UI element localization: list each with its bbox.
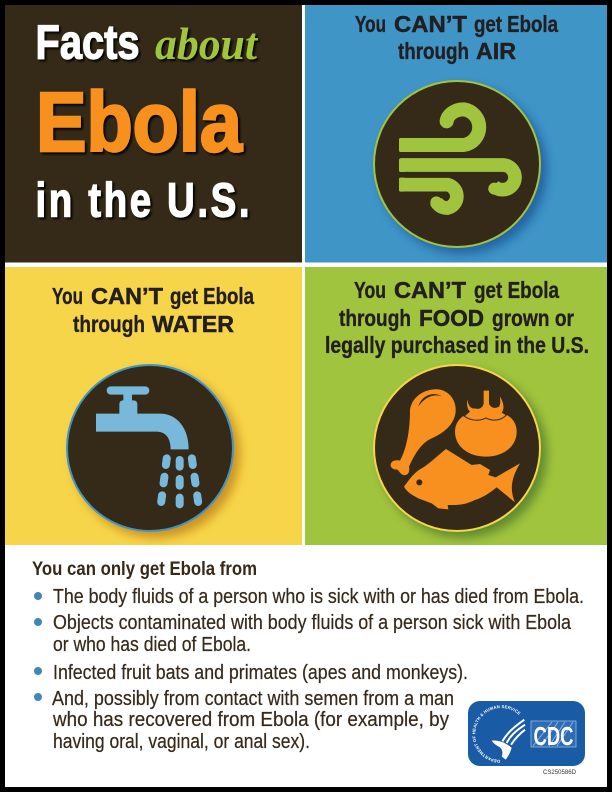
heading: air: through <box>398 38 469 64</box>
heading: air: get Ebola <box>474 11 558 37</box>
heading: water: WATER <box>152 311 234 337</box>
publication code: CS250586D <box>543 770 577 776</box>
panel: water <box>5 267 302 545</box>
heading: food: FOOD <box>419 305 484 331</box>
logo: CDC: CDC <box>534 721 574 751</box>
panel: title <box>5 5 302 262</box>
bullet list: Infected fruit bats and primates (apes and monkeys). <box>53 662 468 684</box>
text block: how you can get Ebola <box>32 558 584 753</box>
heading: air: AIR <box>476 38 516 64</box>
heading: food <box>325 277 589 358</box>
heading: food: You <box>354 277 386 303</box>
title: Facts about Ebola in the U.S.: Facts <box>36 16 140 70</box>
icon: wind <box>374 81 547 254</box>
heading: water: CAN’T <box>91 283 163 309</box>
panel: air <box>305 5 607 262</box>
heading: food: get Ebola <box>474 277 559 303</box>
icon: drumstick <box>391 389 456 475</box>
subheading: You can only get Ebola from <box>32 558 257 580</box>
logo: HHS seal: DEPARTMENT OF HEALTH & HUMAN SERVICES • USA <box>472 705 521 763</box>
heading: air: You <box>355 11 386 37</box>
heading: water: through <box>73 311 145 337</box>
icon: fish <box>404 449 520 509</box>
heading: water: get Ebola <box>170 283 254 309</box>
bullet list <box>34 586 584 753</box>
icon: faucet <box>67 365 240 538</box>
title: Facts about Ebola in the U.S.: about <box>155 18 258 69</box>
heading: food: through <box>339 305 411 331</box>
heading: air: CAN’T <box>394 11 467 37</box>
title: Facts about Ebola in the U.S.: Ebola <box>36 75 243 169</box>
heading: food: CAN’T <box>394 277 466 303</box>
icon: tomato <box>455 391 517 457</box>
bullet list: or who has died of Ebola. <box>53 634 251 656</box>
icon: food <box>374 365 547 538</box>
title: Facts about Ebola in the U.S. <box>36 16 258 228</box>
bullet list: who has recovered from Ebola (for example, by <box>52 709 449 731</box>
heading: air <box>355 11 558 64</box>
bullet list: And, possibly from contact with semen from a man <box>52 688 454 710</box>
heading: water: You <box>52 283 83 309</box>
heading: water <box>52 283 254 337</box>
bullet list: having oral, vaginal, or anal sex). <box>53 731 310 753</box>
panel: food <box>305 267 607 545</box>
title: Facts about Ebola in the U.S.: in the U.S. <box>36 175 252 228</box>
heading: food: grown or <box>492 305 574 331</box>
